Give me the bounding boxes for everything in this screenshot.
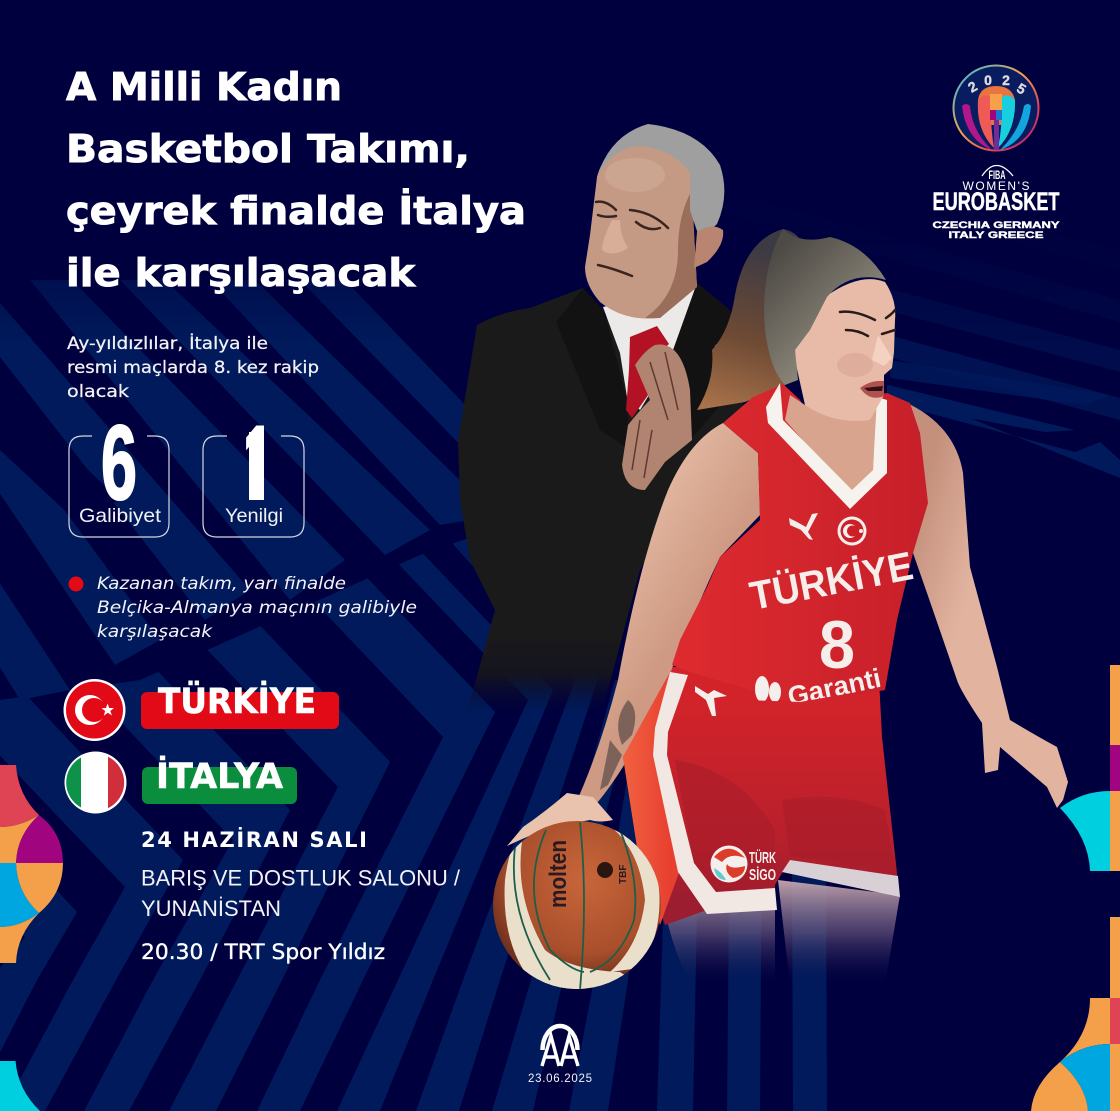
fiba arc (982, 166, 1013, 176)
player jersey name: TÜRKİYE (746, 543, 917, 619)
title: A Milli Kadın (66, 65, 342, 110)
player shorts (623, 660, 900, 925)
EuroBasket wordmark: FIBA (988, 168, 1006, 182)
coach hands (622, 345, 692, 490)
team label: Italy: İTALYA (156, 755, 283, 797)
player sponsor: Garanti (785, 663, 884, 712)
AA logo (542, 1026, 578, 1066)
player shorts sponsor (710, 846, 776, 884)
left decorative shape (0, 765, 63, 963)
player puma logo (789, 513, 818, 540)
venue: BARIŞ VE DOSTLUK SALONU / (141, 866, 461, 890)
emblem year: 2 (1002, 72, 1010, 88)
title: ile karşılaşacak (66, 251, 416, 296)
top fade (0, 0, 1120, 345)
emblem centre blocks (990, 94, 1002, 150)
basketball (493, 821, 661, 1000)
player shorts white stripe (653, 672, 777, 914)
venue (141, 866, 461, 921)
coach neck and face (585, 145, 697, 319)
player collar (766, 383, 887, 509)
player shorts side panel (623, 667, 680, 925)
title (66, 65, 526, 296)
team label: Turkey (141, 680, 339, 729)
emblem year (965, 72, 1029, 98)
coach figure (458, 124, 745, 720)
team label: Italy (142, 755, 297, 804)
emblem year: 0 (984, 72, 992, 88)
player jersey crest (838, 516, 866, 546)
EuroBasket wordmark: EUROBASKET (932, 188, 1060, 216)
emblem year: 5 (1014, 80, 1029, 98)
match date: 24 HAZİRAN SALI (141, 827, 367, 852)
player right leg (778, 880, 900, 985)
player shorts right hem (782, 860, 900, 897)
player shorts sponsor: SİGO (749, 866, 776, 884)
player hair top (764, 229, 886, 385)
player lips (860, 381, 884, 398)
match time and channel: 20.30 / TRT Spor Yıldız (141, 940, 385, 964)
player cheek shadow (837, 353, 873, 377)
flag: Italy (64, 752, 126, 814)
player jersey (672, 384, 928, 705)
title: Basketbol Takımı, (66, 127, 470, 172)
emblem petals (978, 95, 994, 148)
player hair ponytail (697, 229, 805, 410)
player facial features (840, 310, 895, 336)
coach features (596, 202, 668, 276)
subtitle (67, 333, 319, 402)
subtitle: Ay-yıldızlılar, İtalya ile (67, 333, 268, 354)
coach hair (597, 124, 724, 240)
stat box: wins (69, 404, 169, 537)
coach forehead highlight (605, 158, 665, 192)
flag: Turkey (64, 679, 126, 741)
ball brand: molten (545, 840, 572, 908)
player right arm (905, 402, 1068, 808)
player arm tattoo (600, 700, 635, 790)
player left leg (662, 890, 775, 985)
note text: karşılaşacak (97, 622, 213, 642)
stat box: wins: Galibiyet (79, 505, 162, 527)
note text (97, 574, 417, 642)
coach ear (694, 226, 723, 268)
stat box: losses: Yenilgi (225, 505, 283, 527)
basketball: TBF (618, 865, 629, 884)
player sponsor (755, 668, 880, 702)
coach lapel (556, 283, 730, 450)
player shorts sponsor: TÜRK (749, 848, 776, 867)
stat box: losses (202, 426, 305, 538)
coach finger lines (632, 352, 678, 478)
EuroBasket wordmark: WOMEN'S (962, 179, 1030, 193)
date: 23.06.2025 (528, 1073, 592, 1085)
EuroBasket wordmark: CZECHIA GERMANY (932, 220, 1060, 231)
coach shirt (603, 283, 697, 410)
player jersey number: 8 (819, 607, 855, 683)
bottom-left cyan shape (0, 1061, 40, 1111)
venue: YUNANİSTAN (141, 896, 281, 921)
right decorative shape: upper (1060, 665, 1120, 871)
coach nose (602, 220, 628, 254)
coach suit (458, 283, 745, 720)
note text: Belçika-Almanya maçının galibiyle (97, 598, 417, 618)
stat box: wins: 6 (101, 404, 137, 522)
player mouth (864, 386, 883, 391)
player ear (777, 326, 797, 364)
subtitle: olacak (67, 382, 129, 402)
title: çeyrek finalde İtalya (66, 187, 526, 234)
EuroBasket wordmark: ITALY GREECE (948, 230, 1044, 241)
right decorative shape: lower (1031, 917, 1120, 1111)
EuroBasket wordmark (932, 166, 1060, 241)
subtitle: resmi maçlarda 8. kez rakip (67, 358, 319, 378)
coach pin and buttons (715, 344, 721, 350)
coach face shadow (645, 190, 697, 318)
emblem dome (978, 86, 1015, 125)
background pattern: upper left overlay (0, 240, 520, 700)
note text: Kazanan takım, yarı finalde (97, 574, 346, 594)
player neck and chest (785, 395, 878, 492)
stat box: losses: 1 (242, 404, 274, 522)
player face (795, 279, 895, 421)
team label: Turkey: TÜRKİYE (158, 680, 316, 722)
right side stripes (720, 145, 1120, 270)
EuroBasket emblem (954, 66, 1038, 150)
coach tie (626, 326, 669, 418)
player figure (493, 229, 1068, 1000)
player shorts folds (675, 760, 895, 890)
player shorts puma logo (695, 686, 727, 716)
player hand (507, 793, 613, 846)
player nose (872, 335, 892, 366)
bullet dot (68, 576, 84, 592)
player left arm (575, 423, 760, 805)
emblem year: 2 (965, 78, 980, 96)
